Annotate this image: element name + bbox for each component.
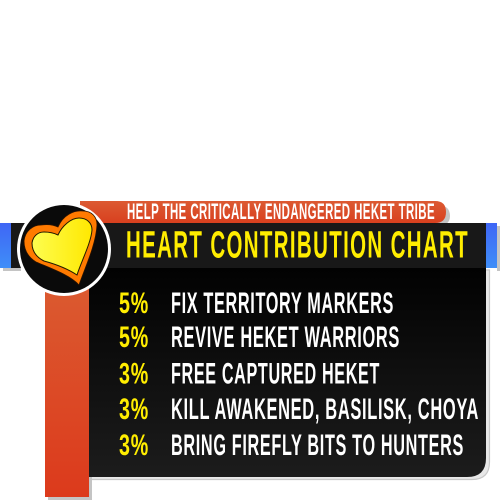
- panel: shadows: [3, 205, 500, 500]
- row 5: 3%: [119, 429, 149, 462]
- row 3: [119, 358, 380, 390]
- panel: red column: [45, 285, 89, 497]
- row 4: 3%: [119, 393, 149, 426]
- row 3: 3%: [119, 358, 149, 390]
- panel: body: [89, 267, 486, 477]
- icon: right blue tab: [486, 223, 497, 268]
- row 1: [119, 287, 394, 320]
- row 2: [119, 321, 400, 354]
- icon: left blue tab: [0, 223, 11, 268]
- panel: title band: [11, 223, 486, 268]
- row 1: 5%: [119, 287, 149, 320]
- icon: heart badge: [17, 202, 111, 296]
- row 2: 5%: [119, 321, 149, 354]
- panel: top banner: [80, 201, 446, 223]
